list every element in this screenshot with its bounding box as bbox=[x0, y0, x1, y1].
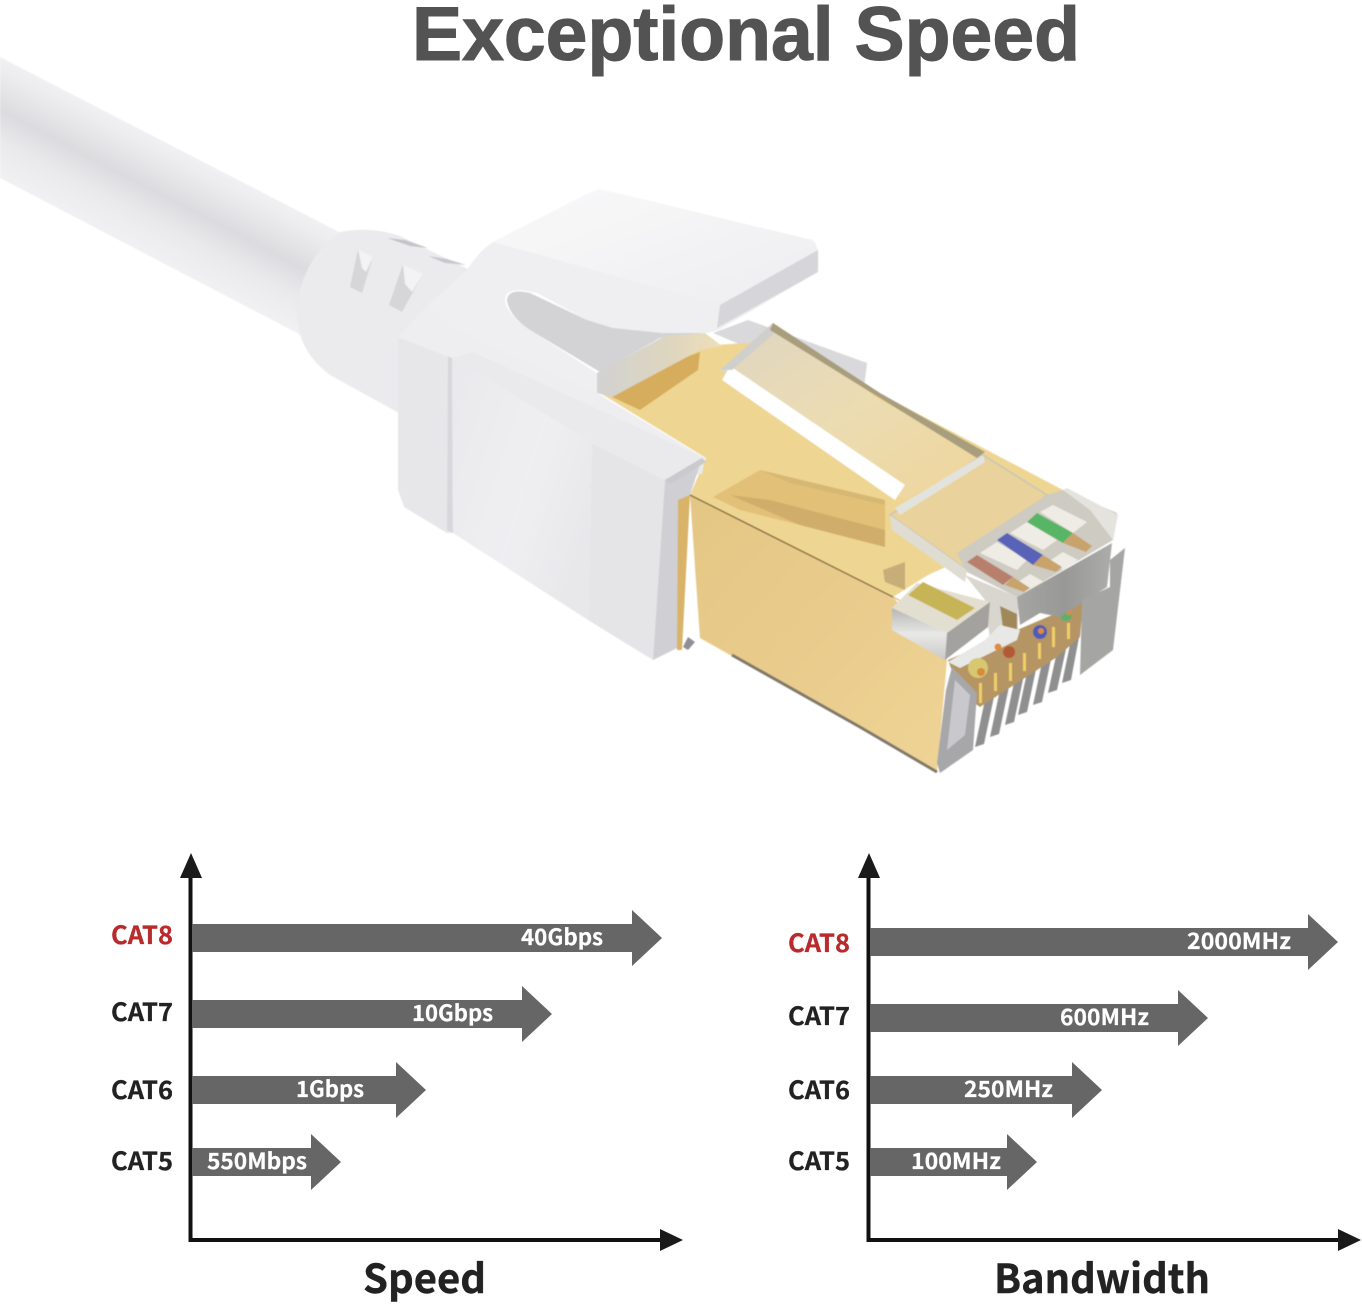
wire: blue bbox=[997, 533, 1043, 565]
row: CAT6 1Gbps: CAT6 bbox=[111, 1071, 173, 1107]
row: CAT8 2000MHz: CAT8 bbox=[788, 924, 850, 960]
axis label: Bandwidth: Bandwidth bbox=[994, 1247, 1210, 1305]
row: CAT5 550Mbps: 550Mbps bbox=[207, 1144, 307, 1176]
wire: red bbox=[967, 555, 1013, 585]
y axis arrow bbox=[180, 853, 202, 1242]
gold shield top bbox=[600, 340, 1063, 597]
row: CAT5 100MHz: 100MHz bbox=[911, 1144, 1001, 1176]
bandwidth chart bbox=[788, 853, 1361, 1305]
wire compartment bbox=[957, 488, 1118, 597]
white housing cap and side tab bbox=[452, 352, 706, 660]
front contact shield bbox=[1017, 543, 1125, 675]
row: CAT8 2000MHz bbox=[788, 914, 1338, 970]
row: CAT7 600MHz: 600MHz bbox=[1060, 1000, 1149, 1032]
row: CAT6 1Gbps bbox=[111, 1062, 426, 1118]
x axis arrow bbox=[866, 1229, 1361, 1251]
row: CAT6 250MHz: CAT6 bbox=[788, 1071, 850, 1107]
row: CAT7 600MHz bbox=[788, 990, 1208, 1046]
orange wire ends bbox=[968, 609, 1072, 678]
row: CAT8 40Gbps bbox=[111, 910, 662, 966]
latch paddle bbox=[428, 189, 818, 397]
row: CAT6 1Gbps: 1Gbps bbox=[296, 1072, 364, 1104]
row: CAT5 550Mbps: CAT5 bbox=[111, 1142, 173, 1178]
row: CAT5 100MHz: CAT5 bbox=[788, 1142, 850, 1178]
wire: green bbox=[1027, 513, 1073, 543]
row: CAT6 250MHz: 250MHz bbox=[964, 1072, 1053, 1104]
row: CAT6 250MHz bbox=[788, 1062, 1102, 1118]
back latch shoulder behind clear tab bbox=[713, 320, 867, 388]
row: CAT7 600MHz: CAT7 bbox=[788, 997, 850, 1033]
x axis arrow bbox=[188, 1229, 683, 1251]
row: CAT8 40Gbps: 40Gbps bbox=[521, 920, 603, 952]
row: CAT5 100MHz bbox=[788, 1134, 1037, 1190]
illustration: Ethernet cable with RJ45 connector bbox=[0, 57, 1125, 773]
teeth bbox=[975, 632, 1080, 747]
copper conductors bbox=[1005, 533, 1092, 592]
wire: white pairs bbox=[980, 505, 1087, 594]
row: CAT5 550Mbps bbox=[111, 1134, 341, 1190]
y axis arrow bbox=[858, 853, 880, 1242]
row: CAT7 10Gbps: 10Gbps bbox=[412, 996, 493, 1028]
contacts and teeth bbox=[937, 602, 1083, 773]
row: CAT8 40Gbps: CAT8 bbox=[111, 916, 173, 952]
strain relief boot bbox=[297, 230, 470, 425]
connector rear housing bbox=[398, 305, 703, 533]
cable jacket bbox=[0, 57, 345, 370]
clear front block and wire behind bbox=[892, 575, 1018, 660]
clear plastic clip bbox=[720, 323, 1047, 582]
row: CAT8 2000MHz: 2000MHz bbox=[1187, 924, 1291, 956]
speed chart bbox=[111, 853, 683, 1305]
gold shield side bbox=[677, 495, 947, 772]
row: CAT7 10Gbps bbox=[111, 986, 552, 1042]
axis label: Speed: Speed bbox=[363, 1247, 486, 1305]
row: CAT7 10Gbps: CAT7 bbox=[111, 993, 173, 1029]
